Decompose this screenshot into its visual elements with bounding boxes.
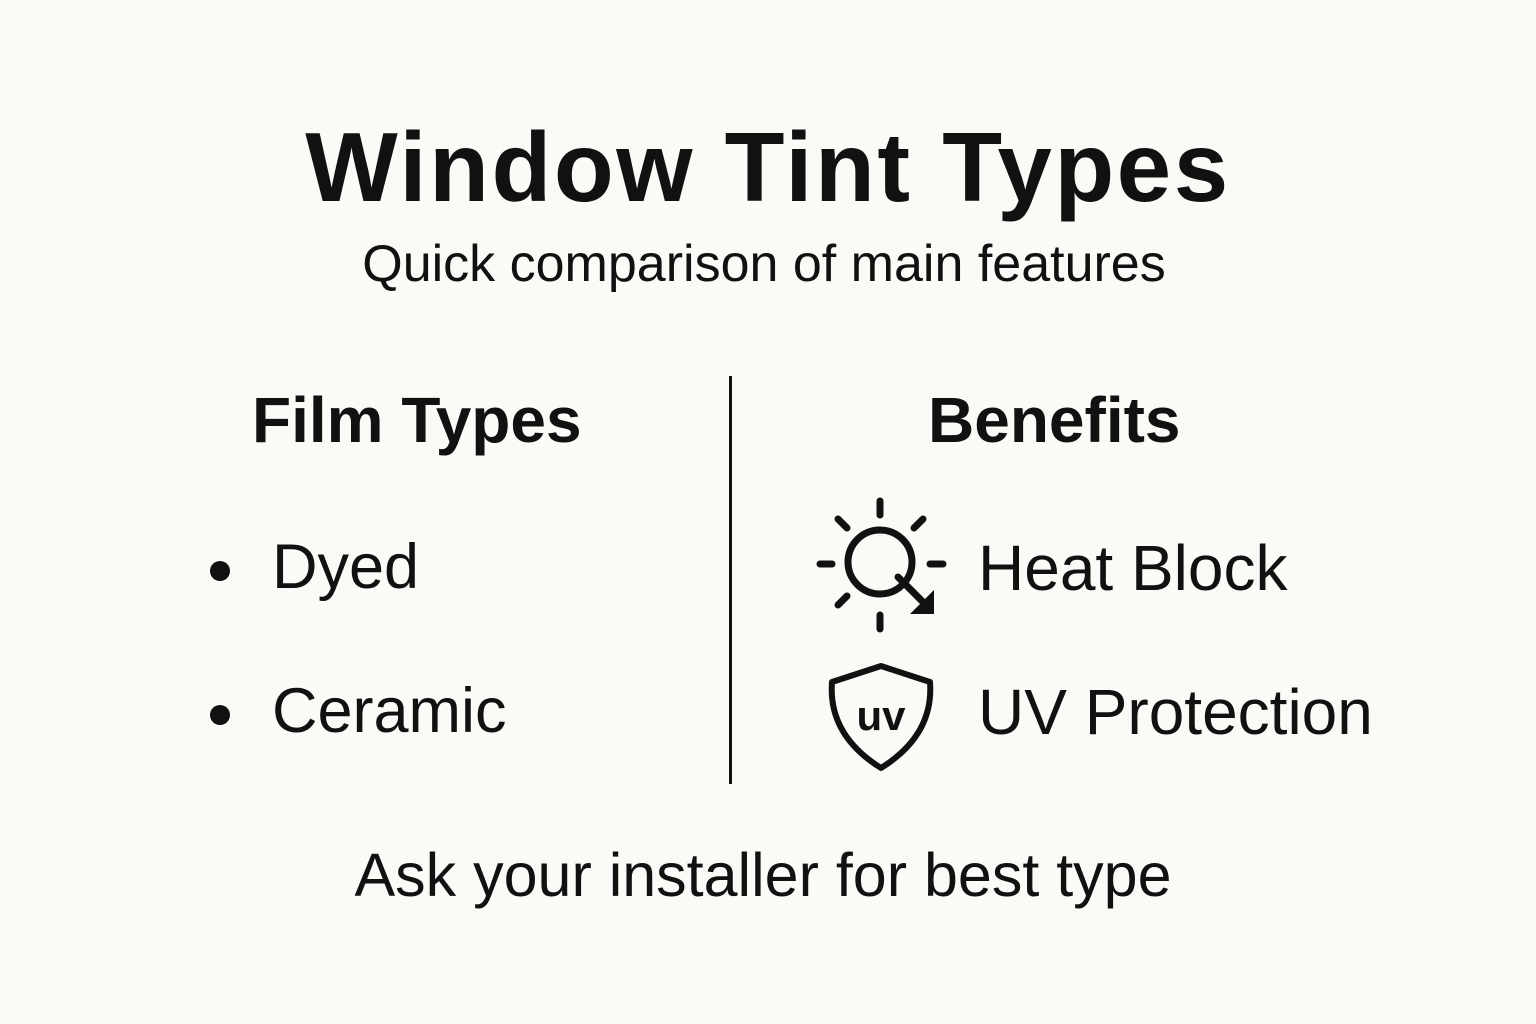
divider	[729, 376, 732, 784]
text: heat block: Heat Block	[978, 532, 1287, 604]
panel: benefits	[816, 384, 1373, 771]
icon: sun heat block	[816, 498, 946, 632]
icon: uv shield	[828, 663, 934, 771]
icon: uv shield: uv	[856, 692, 906, 739]
item: dyed: Dyed	[272, 532, 419, 602]
text: uv protection: UV Protection	[978, 676, 1373, 748]
heading: film types: Film Types	[252, 384, 582, 456]
heading: benefits: Benefits	[928, 384, 1180, 456]
item: ceramic: Ceramic	[272, 676, 507, 746]
panel: film types	[210, 384, 582, 746]
footer: Ask your installer for best type	[354, 841, 1172, 909]
subtitle: Quick comparison of main features	[362, 235, 1166, 293]
title: Window Tint Types	[305, 112, 1231, 222]
